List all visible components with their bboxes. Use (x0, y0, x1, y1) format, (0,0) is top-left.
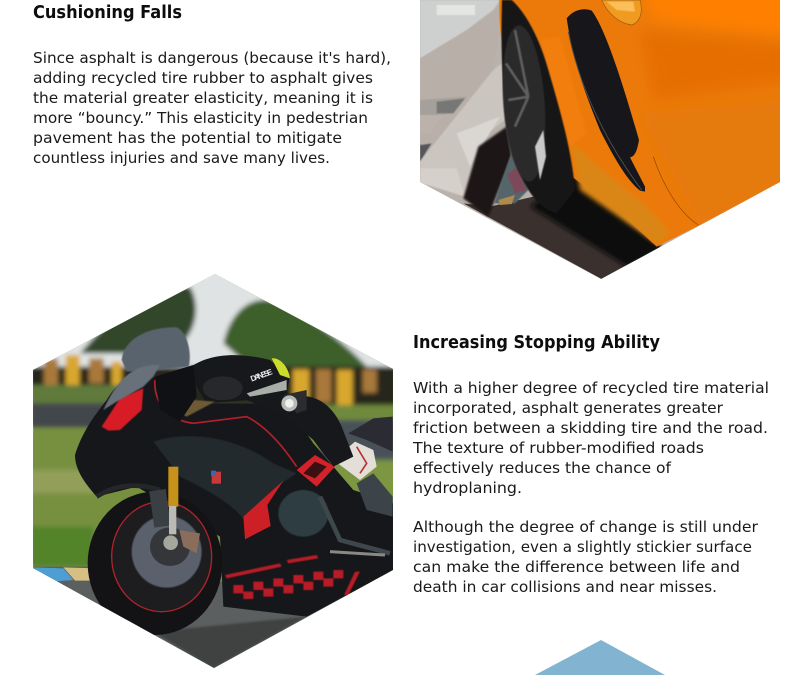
text block: cushioning falls body: more “bouncy.” This elasticity in pedestrian (33, 109, 368, 127)
hexagon photo: motorcycle on racetrack (30, 263, 397, 670)
text block: stopping ability paragraph one: incorporated, asphalt generates greater (413, 399, 724, 417)
rider (187, 355, 353, 467)
red panels (243, 481, 283, 539)
hexagon photo: orange sports car at kerb (420, 0, 793, 280)
track background (33, 270, 393, 670)
text block: stopping ability paragraph two: death in car collisions and near misses. (413, 578, 717, 596)
heading: Increasing Stopping Ability: Increasing Stopping Ability (413, 332, 660, 353)
door handle (602, 0, 641, 25)
text block: stopping ability paragraph one: hydroplaning. (413, 479, 522, 497)
text block: stopping ability paragraph one (412, 379, 769, 497)
wheel rim (502, 25, 546, 182)
belly pan checker (225, 555, 360, 599)
engine (278, 490, 328, 537)
text block: stopping ability paragraph one: effectively reduces the chance of (413, 459, 672, 477)
text block: cushioning falls body: pavement has the potential to mitigate (33, 129, 342, 147)
side vent (567, 9, 645, 192)
text block: stopping ability paragraph two: Although the degree of change is still under (413, 518, 759, 536)
text block: cushioning falls body: Since asphalt is dangerous (because it's hard), (33, 49, 391, 67)
hexagon photo: top of next blue image (535, 640, 665, 675)
fork (168, 467, 178, 507)
heading: Cushioning Falls: Cushioning Falls (33, 2, 182, 23)
front wheel (88, 492, 222, 635)
pavement and kerb (420, 0, 505, 197)
text block: stopping ability paragraph two: can make the difference between life and (413, 558, 740, 576)
hexagon photo: motorcycle on racetrack: DAINESE (249, 367, 274, 384)
number decal (212, 472, 221, 484)
text block: cushioning falls body: adding recycled tire rubber to asphalt gives (33, 69, 373, 87)
text block: cushioning falls body: the material greater elasticity, meaning it is (33, 89, 373, 107)
car body (499, 0, 780, 247)
motorcycle bodywork (75, 374, 393, 617)
text block: cushioning falls body (33, 49, 391, 167)
text block: cushioning falls body: countless injuries and save many lives. (33, 149, 330, 167)
kerb and asphalt (33, 566, 97, 604)
text block: stopping ability paragraph one: With a higher degree of recycled tire material (413, 379, 769, 397)
ground (463, 197, 660, 280)
text block: stopping ability paragraph two (413, 518, 759, 596)
tyre (502, 0, 575, 213)
text block: stopping ability paragraph one: friction between a skidding tire and the road. (413, 419, 768, 437)
text block: stopping ability paragraph two: investigation, even a slightly stickier surface (413, 538, 752, 556)
rear bike and boot (348, 417, 393, 452)
helmet and windscreen (122, 327, 190, 372)
text block: stopping ability paragraph one: The texture of rubber-modified roads (412, 439, 704, 457)
